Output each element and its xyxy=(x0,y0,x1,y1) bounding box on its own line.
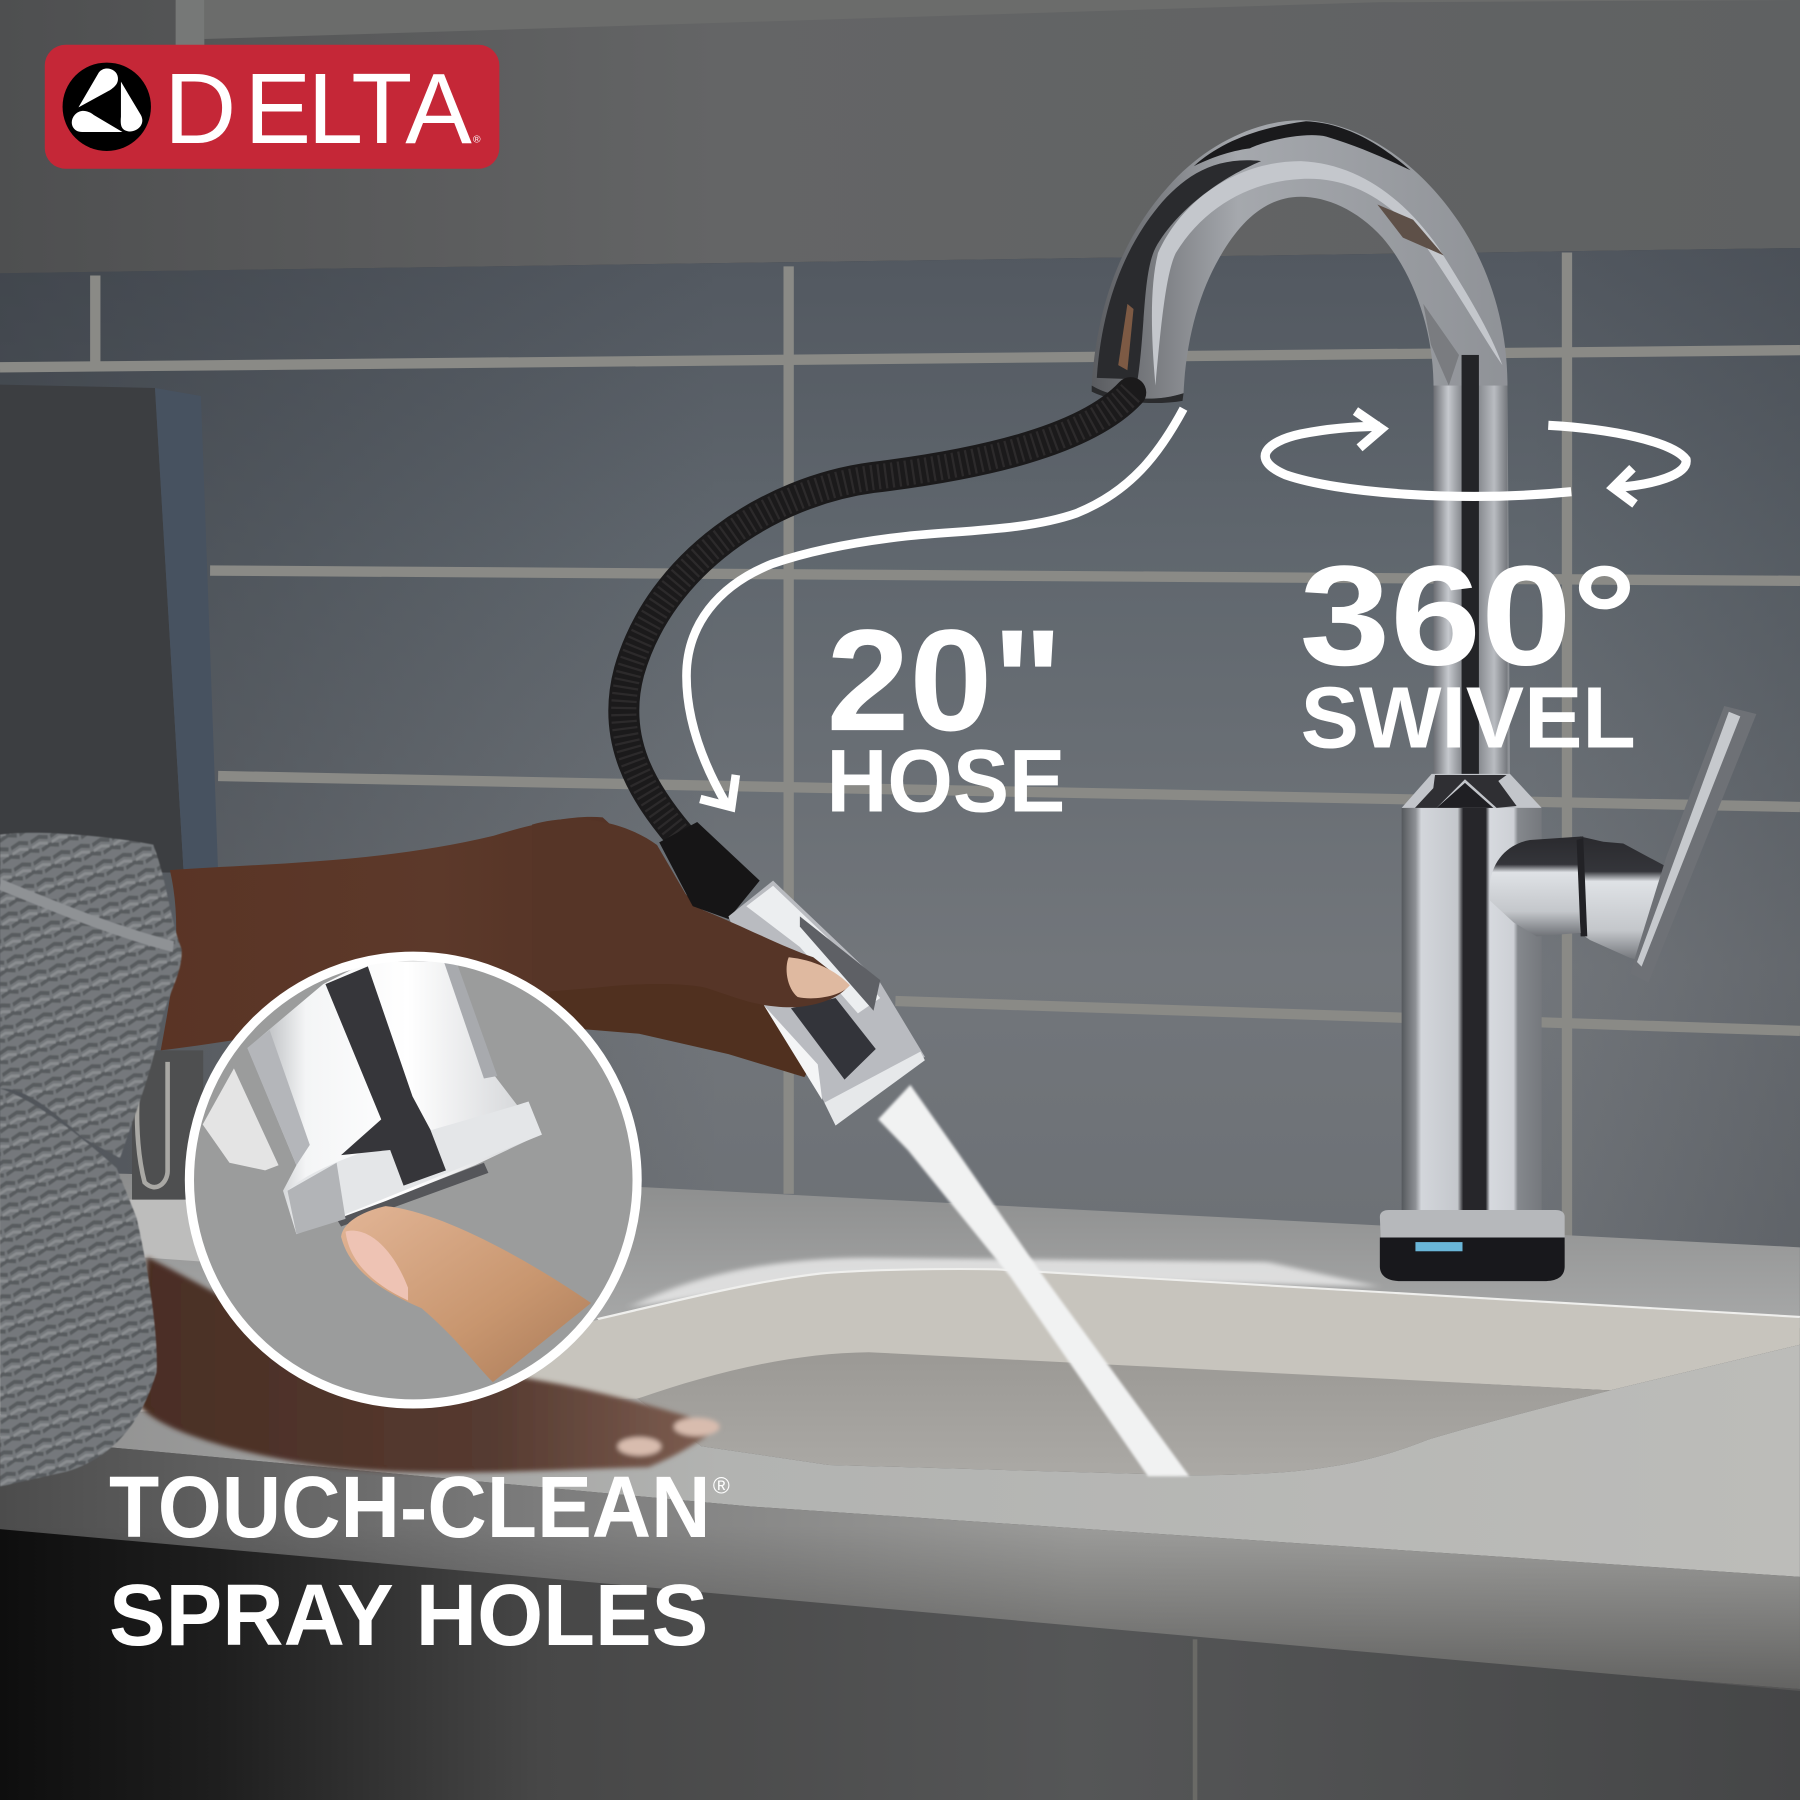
thumbnail xyxy=(787,957,850,998)
chrome body xyxy=(728,881,925,1126)
back counter surface xyxy=(0,1171,1800,1440)
label: spray holes: SPRAY HOLES xyxy=(109,1567,708,1664)
registered mark: ® xyxy=(713,1472,730,1498)
spray head xyxy=(659,822,925,1126)
base black ring xyxy=(1380,1238,1565,1281)
fingernail xyxy=(346,1231,408,1300)
upper arm xyxy=(161,817,712,1050)
counter highlight xyxy=(630,1258,1379,1307)
gooseneck spout xyxy=(1092,120,1510,778)
Delta logo xyxy=(45,45,499,169)
fingernails xyxy=(674,1418,720,1436)
lower sleeve xyxy=(0,1088,157,1487)
cabinet below the counter xyxy=(0,1529,1800,1800)
label: touch-clean: TOUCH-CLEAN xyxy=(109,1459,711,1556)
mounting bracket xyxy=(203,1068,279,1170)
sink rim face xyxy=(470,1270,1800,1415)
faucet xyxy=(1092,120,1756,1281)
dark chrome reflection xyxy=(325,966,446,1186)
lower hand xyxy=(140,1257,721,1473)
spray nozzle strip xyxy=(337,1163,488,1226)
chrome spray body xyxy=(247,961,540,1234)
hand and thumb holding spray head xyxy=(532,819,850,1007)
background: subway tile wall xyxy=(0,248,1800,1274)
hose xyxy=(624,393,1131,836)
handle lever xyxy=(1630,706,1756,983)
water stream xyxy=(878,1085,1189,1476)
fingertip xyxy=(341,1206,591,1382)
faucet body xyxy=(1402,774,1542,1219)
logo wordmark: DELTA xyxy=(164,54,472,165)
sweater sleeve xyxy=(0,833,182,1487)
dark appliance at left xyxy=(0,385,218,872)
background: countertop and sink xyxy=(0,1171,1800,1689)
handle connector xyxy=(1490,836,1675,961)
logo registered mark: ® xyxy=(473,134,481,145)
front counter surface xyxy=(0,1345,1800,1577)
base plate xyxy=(1380,1210,1565,1244)
counter front edge xyxy=(0,1437,1800,1689)
logo icon xyxy=(63,63,151,151)
lower fingers xyxy=(550,937,818,1077)
upper cuff xyxy=(0,833,182,1158)
label: hose: HOSE xyxy=(827,731,1065,831)
sink basin xyxy=(638,1352,1610,1475)
inset detail circle xyxy=(189,956,637,1404)
label: 360 degrees: 360° xyxy=(1299,537,1637,696)
arrow: 360 swivel xyxy=(1265,411,1686,504)
arrow: hose length xyxy=(686,409,1184,807)
label: swivel: SWIVEL xyxy=(1301,669,1636,766)
faucet hardware behind wrist xyxy=(126,1050,218,1263)
cuff fold xyxy=(0,884,173,947)
rim highlight xyxy=(598,1269,1800,1319)
LED light xyxy=(1415,1242,1462,1251)
black sleeve xyxy=(659,822,760,919)
background: upper wall xyxy=(0,0,1800,278)
label: 20 inch: 20" xyxy=(827,599,1063,761)
